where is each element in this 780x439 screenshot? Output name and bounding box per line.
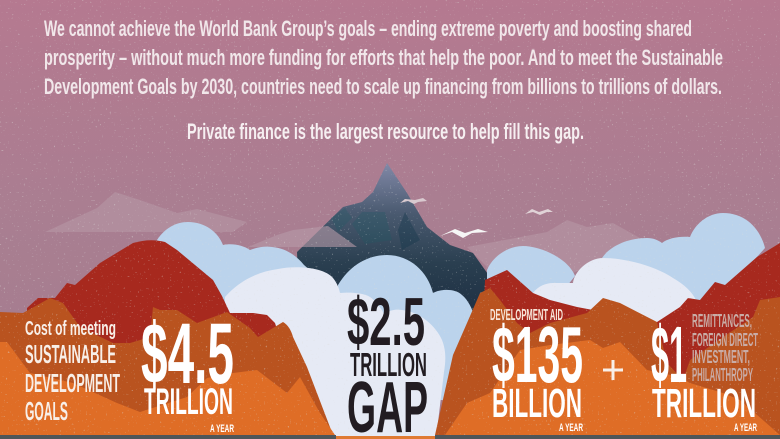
figure: 4.5 trillion bbox=[141, 306, 234, 435]
distant pale mountains bbox=[45, 192, 640, 280]
rust orange ridges bbox=[0, 288, 780, 435]
figure: 1 trillion private finance bbox=[651, 310, 757, 434]
figure: 2.5 trillion gap: $2.5 bbox=[347, 284, 425, 360]
figure: 135 billion development aid: $135 bbox=[492, 310, 583, 399]
figure: 4.5 trillion: A YEAR bbox=[210, 423, 234, 435]
bottom strip bbox=[0, 435, 780, 439]
bright orange foreground bbox=[0, 340, 780, 435]
birds bbox=[400, 198, 553, 238]
intro text bbox=[44, 16, 723, 99]
figure: 135 billion development aid bbox=[490, 307, 583, 434]
cost of meeting the goals: SUSTAINABLE bbox=[25, 339, 116, 369]
dark central mountain bbox=[297, 163, 490, 330]
figure: 135 billion development aid: BILLION bbox=[492, 380, 582, 426]
cost of meeting the goals: Cost of meeting bbox=[25, 318, 116, 340]
key message: Private finance is the largest resource to help fill this gap. bbox=[187, 119, 584, 144]
figure: 135 billion development aid: A YEAR bbox=[559, 422, 583, 434]
figure: 2.5 trillion gap: TRILLION bbox=[350, 346, 427, 383]
blue clouds bbox=[157, 213, 765, 400]
figure: 1 trillion private finance: A YEAR bbox=[734, 422, 757, 434]
white clouds bbox=[225, 258, 696, 439]
illustration: mountain landscape bbox=[0, 163, 780, 439]
figure: 135 billion development aid: DEVELOPMENT AID bbox=[490, 307, 563, 324]
plus sign bbox=[603, 360, 623, 380]
figure: 1 trillion private finance: $1 bbox=[651, 310, 687, 399]
red mountains bbox=[27, 240, 780, 400]
cost of meeting the goals bbox=[25, 318, 120, 426]
private finance sources bbox=[692, 311, 758, 385]
infographic canvas: DEVELOPMENT bbox=[25, 368, 120, 398]
figure: 4.5 trillion: TRILLION bbox=[144, 381, 233, 422]
cost of meeting the goals: GOALS bbox=[25, 396, 68, 426]
figure: 2.5 trillion gap bbox=[347, 284, 428, 439]
figure: 4.5 trillion: $4.5 bbox=[141, 306, 234, 402]
pale ridge in front of the peak bbox=[248, 226, 357, 247]
